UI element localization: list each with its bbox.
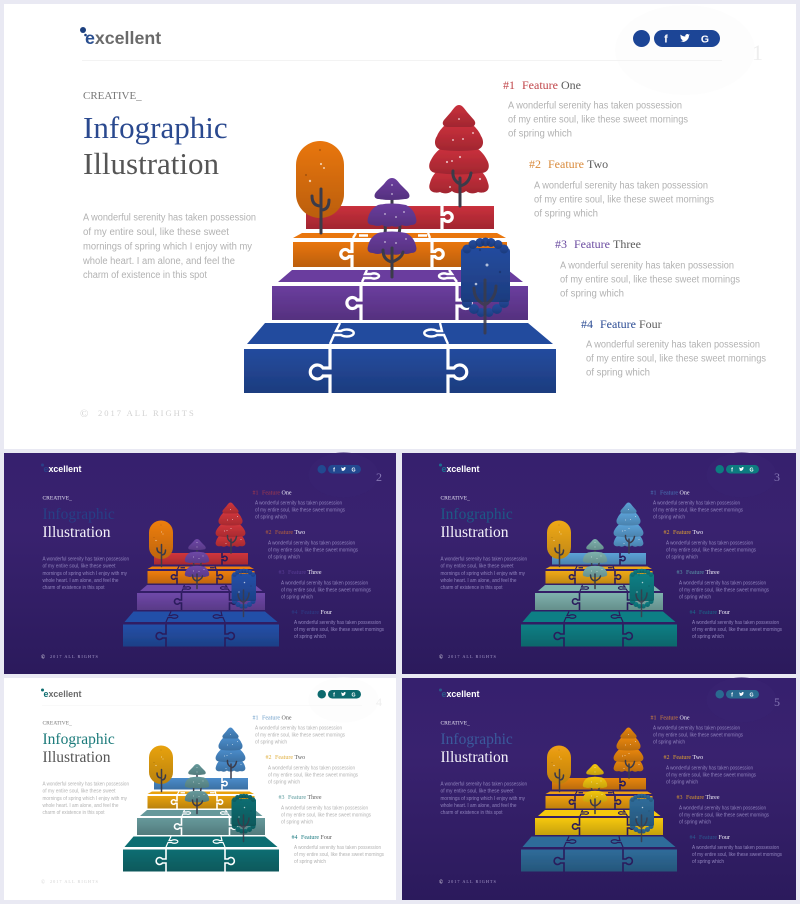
feature one: #1 FeatureOne xyxy=(650,716,690,722)
intro text: charm of existence in this spot xyxy=(440,585,503,591)
eyebrow: CREATIVE_ xyxy=(440,720,470,726)
feature one xyxy=(650,490,743,520)
puzzle stairs and trees xyxy=(123,728,279,872)
feature three xyxy=(555,237,740,300)
logo: excellent xyxy=(442,689,480,699)
feature three: A wonderful serenity has taken possession xyxy=(281,805,368,811)
title: Illustration xyxy=(42,749,111,766)
intro text: mornings of spring which I enjoy with my xyxy=(42,571,127,577)
feature three: A wonderful serenity has taken possession xyxy=(679,805,766,811)
title xyxy=(440,506,513,541)
feature three: of spring which xyxy=(679,819,711,825)
social icons: f xyxy=(731,467,733,473)
feature two xyxy=(664,530,756,560)
intro text: charm of existence in this spot xyxy=(42,810,105,816)
feature four: of my entire soul, like these sweet mornings xyxy=(692,852,782,858)
footer: © xyxy=(439,654,443,660)
feature three xyxy=(278,795,371,825)
panel: slide 3 background xyxy=(402,453,796,674)
feature four: #4 FeatureFour xyxy=(581,317,662,331)
social icons: f xyxy=(333,467,335,473)
feature three xyxy=(676,570,769,600)
feature three xyxy=(278,570,371,600)
feature two: of my entire soul, like these sweet mornings xyxy=(268,772,358,778)
title: Infographic xyxy=(440,506,513,523)
feature one: of spring which xyxy=(653,739,685,745)
feature one: A wonderful serenity has taken possession xyxy=(653,725,740,731)
feature three: of my entire soul, like these sweet mornings xyxy=(281,812,371,818)
feature two: of my entire soul, like these sweet mornings xyxy=(666,547,756,553)
puzzle stairs and trees xyxy=(521,502,677,646)
feature three: of spring which xyxy=(281,819,313,825)
intro text: of my entire soul, like these sweet xyxy=(440,788,514,794)
intro text: of my entire soul, like these sweet xyxy=(440,564,514,570)
feature two: #2 FeatureTwo xyxy=(664,755,703,761)
intro text: whole heart. I am alone, and feel the xyxy=(440,803,517,809)
feature four: A wonderful serenity has taken possession xyxy=(692,620,779,626)
intro text: whole heart. I am alone, and feel the xyxy=(440,578,517,584)
feature two: A wonderful serenity has taken possession xyxy=(268,540,355,546)
feature one: A wonderful serenity has taken possession xyxy=(508,100,682,112)
feature four: of spring which xyxy=(294,634,326,640)
feature two: of spring which xyxy=(666,554,698,560)
feature two: #2 FeatureTwo xyxy=(529,157,608,171)
feature three: #3 FeatureThree xyxy=(278,795,322,801)
feature two: of my entire soul, like these sweet mornings xyxy=(534,194,714,206)
social icons: f xyxy=(333,692,335,698)
feature three: A wonderful serenity has taken possession xyxy=(281,580,368,586)
title xyxy=(440,731,513,766)
intro text: charm of existence in this spot xyxy=(42,585,105,591)
social icons: G xyxy=(351,692,356,698)
title: Illustration xyxy=(440,524,509,541)
footer: 2017 ALL RIGHTS xyxy=(98,408,196,418)
intro text: mornings of spring which I enjoy with my xyxy=(83,242,252,252)
social icons: f xyxy=(664,34,668,46)
feature one: A wonderful serenity has taken possession xyxy=(255,500,342,506)
feature four: #4 FeatureFour xyxy=(292,835,332,841)
feature two xyxy=(664,755,756,785)
intro text: whole heart. I am alone, and feel the xyxy=(42,578,119,584)
footer: © xyxy=(80,408,88,420)
feature two xyxy=(529,157,714,220)
intro text xyxy=(440,781,527,816)
social icons xyxy=(716,690,759,698)
feature three: of spring which xyxy=(281,594,313,600)
intro text: A wonderful serenity has taken possession xyxy=(83,212,256,224)
feature three: #3 FeatureThree xyxy=(555,237,641,251)
title xyxy=(42,731,115,766)
title xyxy=(83,110,228,181)
feature one: of spring which xyxy=(255,739,287,745)
social icons xyxy=(318,465,361,474)
feature three: of my entire soul, like these sweet mornings xyxy=(560,274,740,286)
panel: slide 4 white teal xyxy=(41,678,384,886)
eyebrow: CREATIVE_ xyxy=(42,496,72,502)
slide number: 4 xyxy=(376,695,382,709)
feature one: of my entire soul, like these sweet mornings xyxy=(255,507,345,513)
intro text: A wonderful serenity has taken possession xyxy=(42,781,129,787)
feature one xyxy=(650,716,743,745)
feature one: of my entire soul, like these sweet mornings xyxy=(653,507,743,513)
feature one xyxy=(252,716,345,745)
intro text: A wonderful serenity has taken possession xyxy=(42,556,129,562)
panel: slide 5 dark gold xyxy=(439,678,782,886)
footer: 2017 ALL RIGHTS xyxy=(448,654,497,659)
intro text: mornings of spring which I enjoy with my xyxy=(42,796,127,802)
footer: © xyxy=(41,878,45,886)
intro text: of my entire soul, like these sweet xyxy=(83,227,229,238)
feature one: of spring which xyxy=(255,514,287,520)
title: Illustration xyxy=(83,146,220,181)
feature four: A wonderful serenity has taken possession xyxy=(586,340,760,350)
intro text: mornings of spring which I enjoy with my xyxy=(440,571,525,577)
title: Infographic xyxy=(440,731,513,748)
feature three: of my entire soul, like these sweet mornings xyxy=(281,587,371,593)
feature one: of spring which xyxy=(653,514,685,520)
feature one: of spring which xyxy=(508,128,572,140)
title: Illustration xyxy=(42,524,111,541)
eyebrow: CREATIVE_ xyxy=(42,720,72,726)
intro text: A wonderful serenity has taken possession xyxy=(440,781,527,787)
feature four: A wonderful serenity has taken possession xyxy=(692,845,779,851)
intro text xyxy=(42,781,129,816)
feature four xyxy=(690,610,782,640)
feature two xyxy=(266,530,358,560)
feature one xyxy=(252,490,345,520)
feature four: #4 FeatureFour xyxy=(292,610,332,616)
feature three: #3 FeatureThree xyxy=(676,795,720,801)
logo: excellent xyxy=(44,464,82,474)
feature one: of my entire soul, like these sweet mornings xyxy=(653,732,743,738)
feature two: #2 FeatureTwo xyxy=(664,530,703,536)
feature two: of my entire soul, like these sweet mornings xyxy=(268,547,358,553)
feature two: A wonderful serenity has taken possession xyxy=(534,180,708,192)
intro text: of my entire soul, like these sweet xyxy=(42,564,116,570)
intro text xyxy=(82,212,256,281)
feature four: of spring which xyxy=(692,634,724,640)
feature four: of spring which xyxy=(294,859,326,865)
feature three: of spring which xyxy=(560,288,624,300)
puzzle stairs and trees xyxy=(521,728,677,872)
eyebrow: CREATIVE_ xyxy=(83,90,142,102)
social icons: G xyxy=(351,467,356,473)
feature four xyxy=(690,835,782,865)
feature one xyxy=(503,78,688,140)
intro text: whole heart. I am alone, and feel the xyxy=(82,256,235,267)
panel: slide 2 dark red xyxy=(41,452,384,660)
footer: © xyxy=(439,878,443,886)
footer xyxy=(41,878,99,886)
panel: slide 5 background xyxy=(402,678,796,900)
feature two: of spring which xyxy=(666,779,698,785)
feature four: A wonderful serenity has taken possession xyxy=(294,620,381,626)
social icons xyxy=(633,30,720,47)
feature four: of my entire soul, like these sweet mornings xyxy=(692,627,782,633)
footer xyxy=(41,654,99,660)
feature two: of spring which xyxy=(268,779,300,785)
footer xyxy=(439,654,497,660)
feature one: #1 FeatureOne xyxy=(252,716,292,722)
feature two: of spring which xyxy=(268,554,300,560)
feature four: of spring which xyxy=(586,368,650,378)
feature four: #4 FeatureFour xyxy=(690,835,730,841)
slide number: 2 xyxy=(376,470,382,484)
feature two: A wonderful serenity has taken possession xyxy=(666,765,753,771)
feature two: A wonderful serenity has taken possession xyxy=(666,540,753,546)
feature three: of my entire soul, like these sweet mornings xyxy=(679,812,769,818)
panel: slide 3 dark teal xyxy=(439,452,782,660)
footer: 2017 ALL RIGHTS xyxy=(448,879,497,884)
intro text: of my entire soul, like these sweet xyxy=(42,788,116,794)
feature four: #4 FeatureFour xyxy=(690,610,730,616)
feature two: of my entire soul, like these sweet mornings xyxy=(666,772,756,778)
feature three: #3 FeatureThree xyxy=(278,570,322,576)
intro text xyxy=(440,556,527,591)
logo: excellent xyxy=(44,689,82,699)
footer: © xyxy=(41,654,45,660)
intro text: A wonderful serenity has taken possession xyxy=(440,556,527,562)
title: Infographic xyxy=(83,110,228,145)
feature three: A wonderful serenity has taken possession xyxy=(560,260,734,272)
intro text: mornings of spring which I enjoy with my xyxy=(440,796,525,802)
feature one: of my entire soul, like these sweet mornings xyxy=(255,732,345,738)
title: Illustration xyxy=(440,749,509,766)
title: Infographic xyxy=(42,506,115,523)
feature four: of my entire soul, like these sweet mornings xyxy=(294,852,384,858)
panel: slide 4 background xyxy=(4,678,396,900)
feature two: of spring which xyxy=(534,208,598,220)
feature two xyxy=(266,755,358,785)
feature four: A wonderful serenity has taken possession xyxy=(294,845,381,851)
eyebrow: CREATIVE_ xyxy=(440,496,470,502)
panel: slide 2 background xyxy=(4,453,396,674)
feature one: #1 FeatureOne xyxy=(252,490,292,496)
feature three: of my entire soul, like these sweet mornings xyxy=(679,587,769,593)
title xyxy=(42,506,115,541)
feature four xyxy=(292,835,384,865)
feature one: A wonderful serenity has taken possession xyxy=(255,725,342,731)
logo: excellent xyxy=(442,464,480,474)
feature one: #1 FeatureOne xyxy=(503,78,581,92)
feature two: #2 FeatureTwo xyxy=(266,755,305,761)
puzzle stairs and trees xyxy=(123,502,279,646)
intro text: whole heart. I am alone, and feel the xyxy=(42,803,119,809)
slide number: 3 xyxy=(774,470,780,484)
feature two: #2 FeatureTwo xyxy=(266,530,305,536)
feature four xyxy=(581,317,766,378)
slide number: 1 xyxy=(752,40,763,65)
panel: slide 1 background xyxy=(4,4,796,449)
feature one: A wonderful serenity has taken possession xyxy=(653,500,740,506)
feature four: of spring which xyxy=(692,859,724,865)
feature two: A wonderful serenity has taken possession xyxy=(268,765,355,771)
feature one: of my entire soul, like these sweet mornings xyxy=(508,114,688,126)
feature one: #1 FeatureOne xyxy=(650,490,690,496)
footer: 2017 ALL RIGHTS xyxy=(50,879,99,884)
panel: slide 1 white xyxy=(80,5,766,420)
intro text: charm of existence in this spot xyxy=(83,270,207,281)
social icons: G xyxy=(749,467,754,473)
feature three: A wonderful serenity has taken possession xyxy=(679,580,766,586)
slide number: 5 xyxy=(774,695,780,709)
social icons xyxy=(716,465,759,474)
title: Infographic xyxy=(42,731,115,748)
footer: 2017 ALL RIGHTS xyxy=(50,654,99,659)
feature four: of my entire soul, like these sweet mornings xyxy=(586,354,766,364)
social icons: G xyxy=(749,692,754,698)
social icons xyxy=(318,690,361,698)
social icons: G xyxy=(701,34,709,46)
feature four xyxy=(292,610,384,640)
feature four: of my entire soul, like these sweet mornings xyxy=(294,627,384,633)
logo: excellent xyxy=(85,28,161,48)
feature three: #3 FeatureThree xyxy=(676,570,720,576)
feature three: of spring which xyxy=(679,594,711,600)
intro text: charm of existence in this spot xyxy=(440,810,503,816)
social icons: f xyxy=(731,692,733,698)
puzzle stairs and trees xyxy=(244,105,556,393)
feature three xyxy=(676,795,769,825)
intro text xyxy=(42,556,129,591)
footer xyxy=(439,878,497,886)
